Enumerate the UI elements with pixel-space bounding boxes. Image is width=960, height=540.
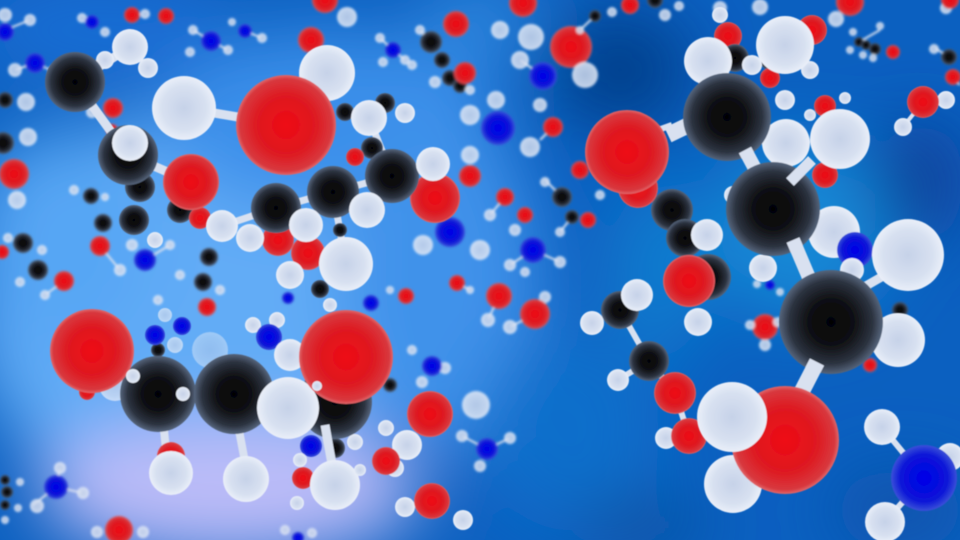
molecule: blue nitrogen at lower right (864, 409, 960, 540)
molecule: right centre chain (580, 110, 777, 454)
molecule: large right chain (668, 7, 944, 513)
molecule: upper left chain (45, 29, 355, 248)
molecule: lower left chain (50, 308, 393, 510)
molecule: water at upper right (894, 86, 955, 136)
molecule: centre chain (206, 93, 460, 312)
molecule: lower centre atoms (372, 391, 473, 530)
